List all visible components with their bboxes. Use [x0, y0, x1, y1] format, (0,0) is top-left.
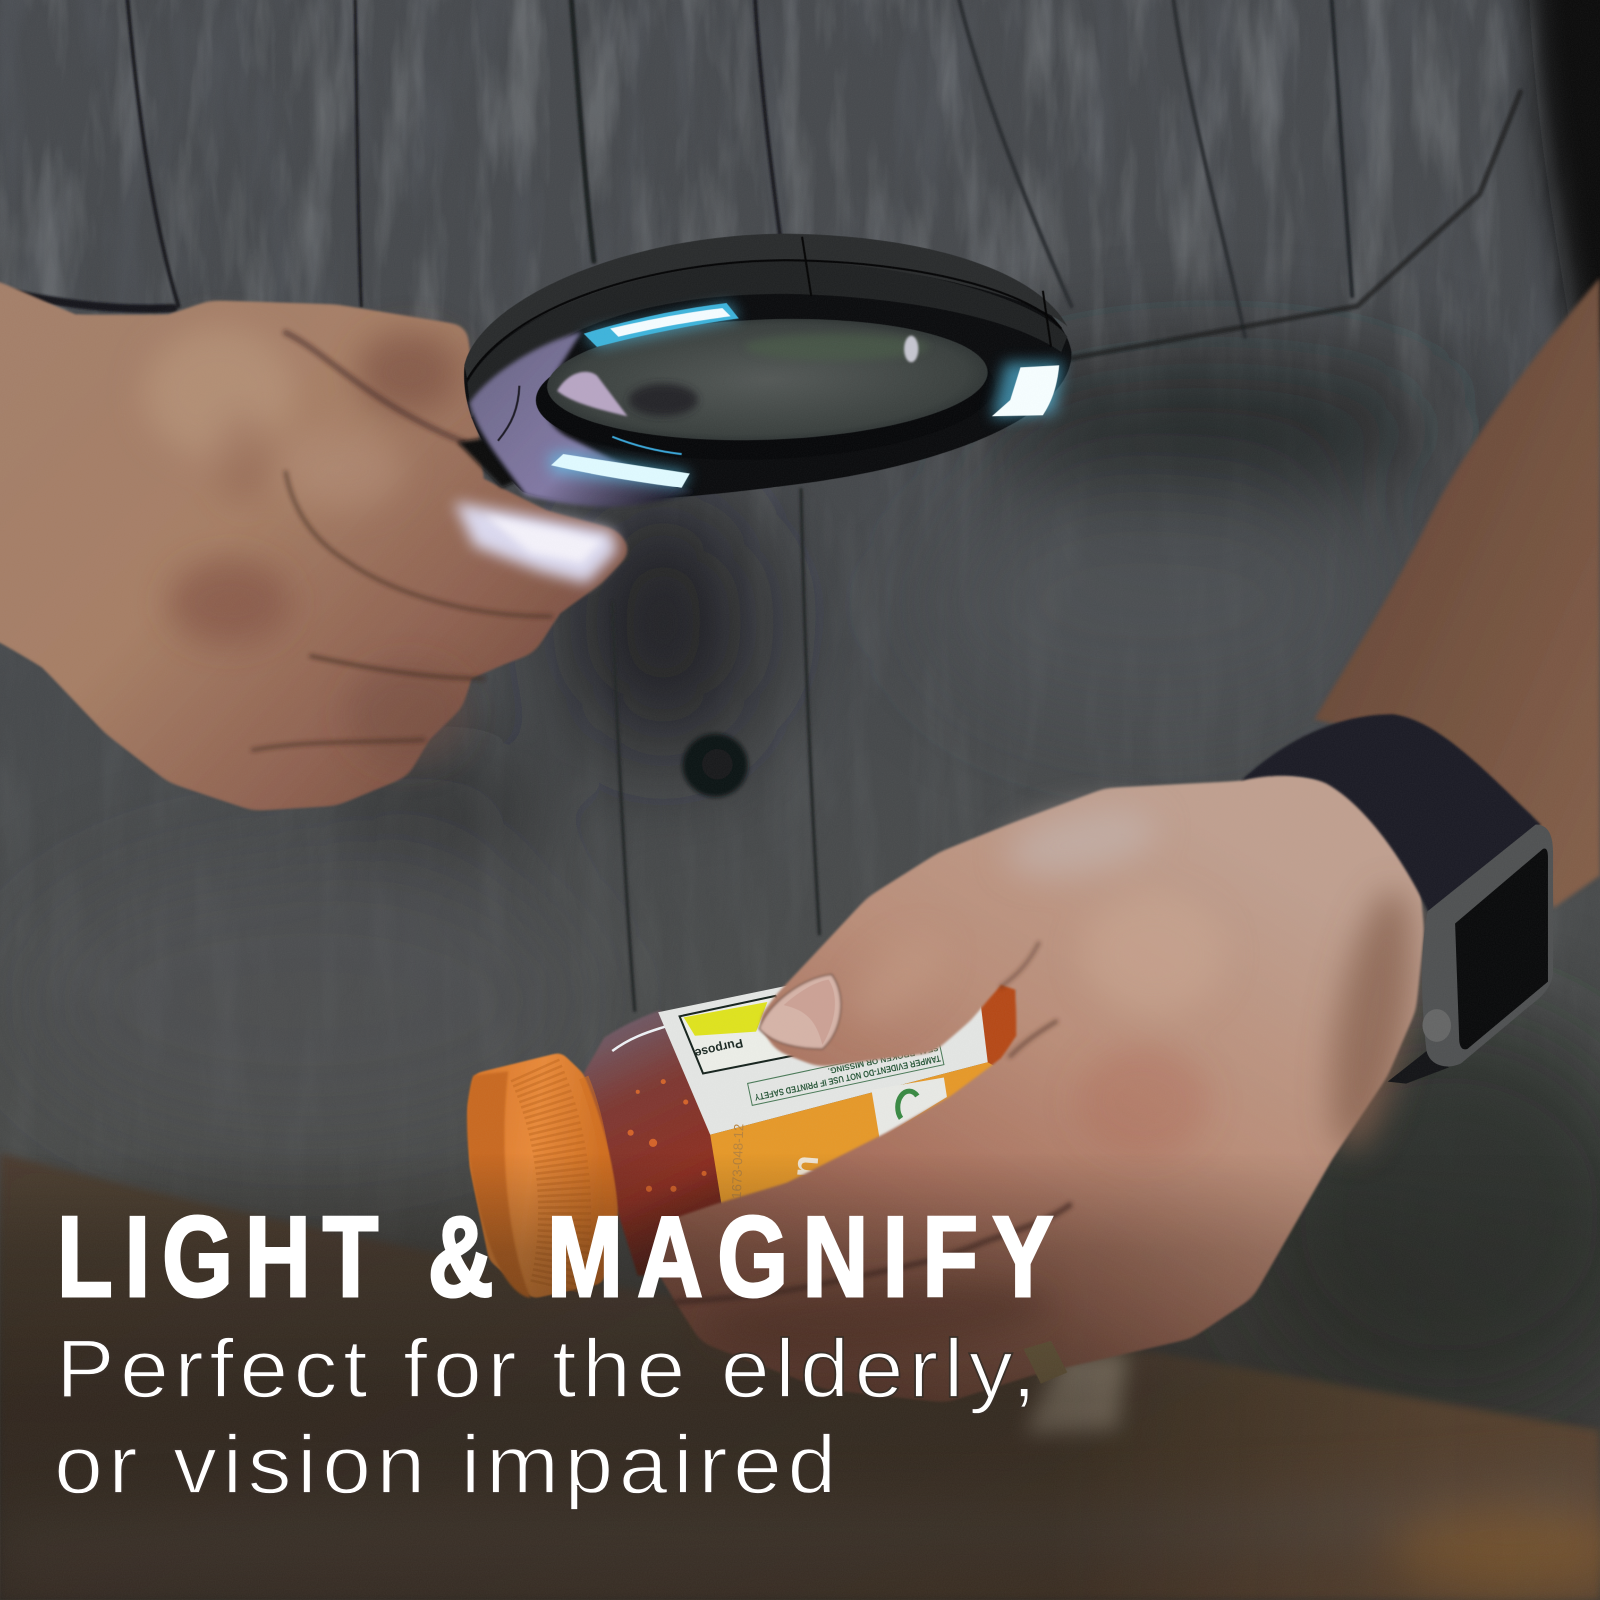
- shirt button: [683, 734, 748, 797]
- tamper notice: TAMPER EVIDENT-DO NOT USE IF PRINTED SAFETY: [754, 1053, 941, 1102]
- heading: LIGHT & MAGNIFY: [57, 1193, 1068, 1320]
- ring: [1023, 1341, 1067, 1384]
- label white: [658, 986, 988, 1135]
- label small text: Purpose: [693, 1036, 744, 1061]
- ring top band: [464, 234, 1067, 380]
- band: [1241, 714, 1541, 913]
- left hand: [0, 276, 633, 811]
- label lot number: 1673-048-12: [729, 1123, 746, 1199]
- tamper notice: SEAL BROKEN OR MISSING.: [827, 1043, 939, 1075]
- bottle glass: [584, 1010, 722, 1276]
- ring second band: [467, 261, 1067, 418]
- thumb highlight: [454, 502, 617, 584]
- orange label: [710, 1062, 995, 1210]
- handle: [457, 437, 524, 488]
- subheading: Perfect for the elderly,: [56, 1322, 1042, 1415]
- pill bottle: [467, 982, 1020, 1299]
- glass sparkles: [628, 1079, 707, 1192]
- tamper notice: [748, 1043, 944, 1105]
- white badge: [871, 1078, 947, 1139]
- dark text scrim: [0, 1153, 1600, 1600]
- ring seams: [802, 237, 1051, 347]
- lens: [545, 312, 990, 454]
- warning box: [680, 996, 816, 1073]
- icon: lighted magnifier: [457, 234, 1071, 506]
- ring base: [464, 235, 1071, 501]
- case: [1422, 824, 1553, 1066]
- wooden table: [0, 1153, 1600, 1600]
- yellow panel: [684, 1002, 767, 1036]
- thumbnail: [759, 974, 841, 1049]
- light strips: [549, 303, 1063, 488]
- subheading: or vision impaired: [54, 1418, 842, 1511]
- right hand: [653, 771, 1430, 1403]
- cap: [467, 1052, 618, 1299]
- smart watch: [1241, 714, 1553, 1084]
- lit face: [469, 332, 694, 506]
- dark inner rim: [534, 319, 997, 467]
- label letter: n: [783, 1153, 826, 1179]
- crown: [1422, 1009, 1451, 1042]
- bottle end glass: [964, 982, 1020, 1066]
- shirt seams, pocket and placket: [0, 0, 1520, 1010]
- subheading: [54, 1322, 1042, 1511]
- right forearm: [1314, 278, 1600, 908]
- face: [1455, 849, 1548, 1049]
